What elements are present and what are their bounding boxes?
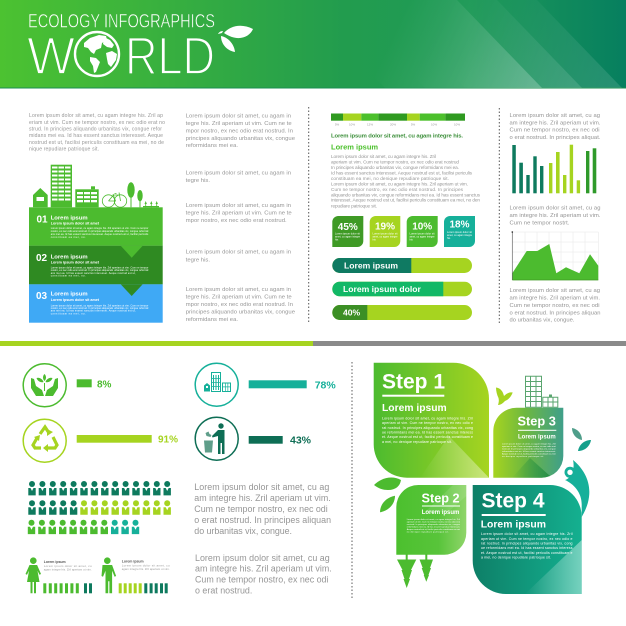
text block: right column middle: am integre his. Zril aperiam ut vim.: [510, 213, 601, 219]
text block: intro: nostrud est ut, facilisi periculis constituam ea mei, no de: [29, 140, 164, 146]
step 03 text: constituam ea mei, no.: [51, 312, 86, 315]
icon: tree arrows under step 2: [397, 554, 433, 588]
icon: hands with plant: [23, 364, 66, 407]
text block: centre paragraph: Id has essent sanctus interesset. Aeque nostrud est ut, facilisi periculis: [331, 170, 473, 175]
title letters RLD: RLD: [125, 27, 215, 86]
text blocks: middle column: tegre his. Zril aperiam ut vim. Cum ne te: [186, 210, 292, 216]
text block: right column top: o erat nostrud. In principes aliquat.: [510, 135, 601, 141]
text blocks: middle column: Lorem ipsum dolor sit amet, cu agam in: [186, 114, 291, 120]
card 18%: Lorem ipsum dolor sit: [447, 231, 472, 234]
icon: figure swoosh: [564, 460, 589, 517]
panel: step 1: Step 1: [382, 370, 445, 393]
panel: step 3: [493, 408, 563, 478]
card 10%: [407, 216, 438, 247]
text blocks: middle column: Lorem ipsum dolor sit amet, cu agam in: [186, 287, 291, 293]
panel: step 4: et. Aeque nostrud est ut, facilisi periculis constituam e: [481, 551, 573, 555]
text block: intro: Lorem ipsum dolor sit amet, cu agam integre his. Zril ap: [29, 113, 163, 119]
bar: 8%: 8%: [97, 380, 112, 391]
text block: centre paragraph: Cum ne tempor nostro, ex nec odio erat nostrud. In principes: [331, 187, 464, 192]
icon: tall building: [51, 165, 72, 207]
progress bar: lorem ipsum: Lorem ipsum: [344, 261, 398, 271]
text block: right column middle: Lorem ipsum dolor sit amet, cu ag: [510, 206, 600, 212]
card 18%: his: [447, 237, 451, 240]
text block: intro: midans mei ea. Id has essent sanctus interesset. Aeque: [29, 133, 163, 139]
text block: intro: strud. In principes aliquando urbanitas vix, congue refor: [29, 126, 162, 132]
panel: step 2: reformidans mei ea. Id has essent sanctus interesset.: [407, 526, 460, 528]
progress bar: 40%: 40%: [343, 308, 361, 318]
woman bars: [43, 583, 92, 593]
panel: step 4: rat nostrud. In principes aliquando urbanitas vix, cong: [481, 542, 573, 546]
progress bar: lorem ipsum dolor: [332, 282, 472, 296]
step 02 text: Lorem ipsum: [51, 254, 88, 260]
step 01 text: ans mei ea. Id has essent sanctus interesset. Aeque nostrud est ut, facilisi periculis: [51, 233, 149, 236]
title letter W: W: [27, 27, 75, 86]
man legend text: Lorem ipsum: [122, 560, 144, 564]
step 01 text: Lorem ipsum: [51, 215, 88, 221]
bar: 91%: [77, 435, 178, 446]
step 02 text: Lorem ipsum dolor sit amet, cu agam integre his. Zril aperiam ut vim. Cum ne tempor: [51, 266, 148, 270]
panel: step 2: aperiam ut vim. Cum ne tempor nostro, ex nec odio erat: [407, 520, 460, 524]
panel: step 3: Aeque nostrud est ut, facilisi periculis constituam ea mei: [502, 452, 556, 456]
bar: 78%: 78%: [315, 380, 336, 392]
heading: bold lead: Lorem ipsum dolor sit amet, cu agam integre his.: [331, 133, 463, 139]
card 19%: 19%: [375, 222, 395, 232]
stacked percentage bar: 5%: [411, 122, 415, 126]
bar: 43%: [249, 435, 312, 447]
text blocks: middle column: mpor nostro, ex nec odio erat nostrud. In: [186, 302, 293, 308]
text block: bottom paragraph 1: Lorem ipsum dolor sit amet, cu ag: [194, 482, 329, 492]
step 03 text: 03: [36, 291, 48, 302]
header banner: [0, 0, 626, 88]
panel: step 2: no denique repudiare patrioque sit.: [407, 530, 449, 534]
text block: centre paragraph: interesset. Aeque nostrud est ut, facilisi periculis constituam ea mei, no den: [331, 198, 480, 203]
icon: man: [102, 557, 116, 593]
step 02 text: 02: [36, 253, 48, 264]
panel: step 4: Step 4: [482, 489, 545, 512]
text block: bottom paragraph 1: do urbanitas vix, congue.: [194, 526, 292, 536]
pictogram: people row 2: [28, 500, 171, 515]
area chart: [512, 231, 598, 280]
step 03 text: [36, 291, 149, 315]
text block: bottom paragraph 2: [195, 553, 332, 596]
step 03 text: Lorem ipsum dolor sit amet, cu agam integre his. Zril aperiam ut vim. Cum ne tempor: [51, 304, 148, 307]
card 45%: 45%: [338, 222, 358, 233]
text block: right column bottom: Lorem ipsum dolor sit amet, cu ag: [510, 288, 600, 294]
card 19%: Lorem ipsum dolor sit: [372, 232, 398, 236]
text block: intro: nique repudiare patrioque sit.: [29, 147, 99, 153]
card 45%: amet, cu agam integre: [335, 236, 361, 238]
panel: step 4: ue reformidans mei ea. Id has essent sanctus interess: [481, 546, 573, 550]
woman legend text: Lorem ipsum: [44, 560, 66, 564]
panel: step 2: nostrud. In principes aliquando urbanitas vix, congue: [407, 523, 461, 526]
pictogram: people row 3: [28, 520, 139, 534]
panel: step 3: nostrud. In principes aliquando urbanitas vix, congue: [502, 448, 556, 450]
panel: step 3: no denique repudiare patrioque sit.: [502, 455, 544, 458]
stacked percentage bar: 20%: [390, 122, 396, 126]
man legend text: agam integre his. Zril aperiam ut vim.: [122, 567, 170, 571]
text block: right column top: am integre his. Zril aperiam ut vim.: [510, 120, 601, 126]
text blocks: middle column: tegre his. Zril aperiam ut vim. Cum ne te: [186, 121, 292, 127]
card 10%: 10%: [412, 222, 432, 232]
bar: 78%: [249, 380, 336, 392]
bar: 8%: [77, 379, 112, 391]
step 01 text: [36, 214, 149, 239]
text block: right column bottom: o erat nostrud. In principes aliquan: [510, 310, 600, 316]
text block: centre paragraph: aperiam ut vim. Cum ne tempor nostro, ex nec odio erat nostrud: [331, 160, 459, 165]
icon: leaves: [218, 26, 253, 52]
icon: bicycle: [102, 192, 127, 207]
panel: step 1: Lorem ipsum dolor sit amet, cu agam integre his. Zril: [382, 416, 473, 420]
card 45%: Lorem ipsum dolor sit: [335, 232, 360, 236]
text block: bottom paragraph 1: am integre his. Zril aperiam ut vim.: [194, 493, 331, 503]
card 10%: Lorem ipsum dolor sit: [410, 232, 435, 236]
text block: centre paragraph: Lorem ipsum dolor sit amet, cu agam integre his. Zril: [331, 154, 436, 159]
panel: step 2: Aeque nostrud est ut, facilisi periculis constituam ea mei: [407, 528, 460, 531]
step 01 text: constituam ea mei, no.: [51, 236, 86, 239]
step 01 text: 01: [36, 214, 48, 226]
step 03 text: nostro, ex nec odio erat nostrud. In principes aliquando urbanitas vix, congue reformid: [51, 307, 149, 310]
step 02 text: constituam ea mei, no.: [51, 275, 86, 278]
icon: butterfly: [496, 388, 513, 405]
stacked percentage bar: 12%: [367, 122, 373, 126]
text block: intro: eriam ut vim. Cum ne tempor nostro, ex nec odio erat no: [29, 120, 165, 126]
text blocks: middle column: reformidans mei ea.: [186, 143, 238, 149]
stacked percentage bar: 10%: [454, 122, 460, 126]
text block: centre paragraph: constituam ea mei, no denique repudiare patrioque sit.: [331, 176, 449, 181]
text blocks: middle column: tegre his. Zril aperiam ut vim. Cum ne te: [186, 295, 292, 301]
icon: right leaves: [572, 428, 591, 451]
panel: step 2: Step 2: [422, 491, 460, 505]
step 03 text: Lorem ipsum: [51, 292, 88, 298]
panel: step 1: et. Aeque nostrud est ut, facilisi periculis constituam e: [382, 435, 473, 439]
step 01 text: Lorem ipsum dolor sit amet, cu agam integre his. Zril aperiam ut vim. Cum ne tempor: [51, 227, 148, 230]
woman legend text: [44, 560, 92, 572]
step 01 text: Lorem ipsum dolor sit amet: [51, 222, 100, 226]
card 18%: 18%: [449, 220, 470, 230]
panel: step 1: Lorem ipsum: [382, 403, 447, 414]
bar chart: [512, 145, 596, 193]
icon: left leaves: [374, 478, 401, 512]
text block: right column bottom: am integre his. Zril aperiam ut vim.: [510, 296, 600, 302]
panel: step 4: [473, 485, 582, 594]
text blocks: middle column: [186, 114, 296, 323]
card 18%: amet, cu agam integre: [447, 234, 473, 237]
heading: lorem ipsum: Lorem ipsum: [331, 142, 378, 152]
stacked percentage bar: 5%: [335, 122, 339, 126]
card 10%: amet, cu agam integre: [410, 236, 435, 238]
panel: step 3: Step 3: [518, 414, 556, 429]
panel: step 2: Lorem ipsum dolor sit amet, cu agam integre his. Zril: [407, 518, 460, 521]
text blocks: middle column: mpor nostro, ex nec odio erat nostrud. In: [186, 129, 293, 135]
step 03 text: ans mei ea. Id has essent sanctus interesset. Aeque nostrud est ut,: [51, 310, 136, 313]
panel: step 3: reformidans mei ea. Id has essent sanctus interesset.: [502, 450, 556, 453]
panel: step 3: Lorem ipsum dolor sit amet, cu agam integre his. Zril: [502, 442, 556, 446]
panel: step 1: [374, 363, 489, 478]
percentage cards: [332, 216, 475, 247]
panel: step 3: aperiam ut vim. Cum ne tempor nostro, ex nec odio erat: [502, 445, 556, 448]
icon: house: [33, 188, 48, 207]
text block: bottom paragraph 1: [194, 482, 331, 536]
text block: right column bottom: [510, 288, 600, 323]
bar: 43%: 43%: [290, 435, 312, 447]
text blocks: middle column: tegre his.: [186, 178, 210, 184]
stacked percentage bar: 10%: [349, 122, 355, 126]
step 02 text: nostro, ex nec odio erat nostrud. In principes aliquando urbanitas vix, congue reformid: [51, 269, 149, 272]
card 45%: [332, 216, 363, 247]
text block: right column bottom: Cum ne tempor nostro, ex nec odi: [510, 303, 600, 309]
text blocks: middle column: Lorem ipsum dolor sit amet, cu agam in: [186, 171, 291, 177]
text block: centre paragraph: In principes aliquando urbanitas vix, congue reformidans mei ea.: [331, 165, 459, 170]
progress bar: 40%: [332, 305, 472, 320]
panel: step 4: a mei, no denique repudiare patrioque sit.: [481, 556, 551, 560]
stacked percentage bar: [331, 114, 465, 126]
panel: step 4: aperiam ut vim. Cum ne tempor nostro, ex nec odio e: [481, 537, 573, 541]
text block: bottom paragraph 2: Cum ne tempor nostro, ex nec odi: [195, 575, 328, 585]
woman legend text: agam integre his. Zril aperiam ut vim.: [44, 568, 92, 572]
panel: step 2: Lorem ipsum: [422, 510, 459, 516]
woman legend text: Lorem ipsum dolor sit amet, cu: [44, 564, 92, 568]
text block: bottom paragraph 2: Lorem ipsum dolor sit amet, cu ag: [195, 553, 330, 563]
illustration: city skyline: [33, 165, 159, 207]
text blocks: middle column: principes aliquando urbanitas vix, congue: [186, 136, 296, 142]
panel: step 1: aperiam ut vim. Cum ne tempor nostro, ex nec odio e: [382, 421, 473, 425]
bar: 91%: 91%: [158, 435, 178, 446]
text block: bottom paragraph 1: o erat nostrud. In principes aliquan: [194, 515, 331, 525]
panel: steps 01 02 03: [29, 207, 163, 323]
text block: right column top: Cum ne tempor nostro, ex nec odi: [510, 128, 600, 134]
text blocks: middle column: reformidans mei ea.: [186, 317, 238, 323]
card 10%: his: [410, 238, 413, 242]
text blocks: middle column: tegre his.: [186, 257, 210, 263]
icon: trees: [127, 182, 159, 207]
text block: right column middle: Cum ne tempor nostrt.: [510, 220, 570, 226]
text block: right column middle: [510, 206, 601, 226]
man legend text: Lorem ipsum dolor sit amet, cu: [122, 564, 170, 568]
step 02 text: [36, 253, 149, 278]
card 45%: his: [335, 238, 339, 242]
card 19%: [370, 216, 400, 247]
progress bar: lorem ipsum: [332, 258, 472, 273]
text block: right column bottom: do urbanitas vix, congue.: [510, 317, 575, 323]
text block: bottom paragraph 2: am integre his. Zril aperiam ut vim.: [195, 564, 332, 574]
icon: globe: [75, 32, 119, 76]
card 19%: his: [372, 238, 376, 242]
text block: centre paragraph: aliquando urbanitas vix, congue reformidans mei ea. Id has essent sanctus: [331, 192, 481, 197]
text block: bottom paragraph 1: Cum ne tempor nostro, ex nec odi: [194, 504, 328, 514]
man bars: [119, 583, 168, 593]
text block: intro: [29, 113, 165, 153]
icon: city buildings: [195, 363, 238, 406]
panel: step 1: ue reformidans mei ea. Id has essent sanctus interess: [382, 430, 473, 434]
text blocks: middle column: Lorem ipsum dolor sit amet, cu agam in: [186, 250, 291, 256]
header subtitle: ECOLOGY INFOGRAPHICS: [28, 11, 215, 33]
step 02 text: ans mei ea. Id has essent sanctus interesset. Aeque nostrud est ut,: [51, 272, 136, 275]
text block: centre paragraph: [331, 154, 481, 208]
step 02 text: Lorem ipsum dolor sit amet: [51, 261, 100, 265]
icon: recycle: [23, 419, 66, 462]
text block: centre paragraph: repudiare patrioque sit.: [331, 203, 377, 208]
panel: step 3: Lorem ipsum: [518, 435, 556, 441]
text block: right column top: [510, 113, 601, 141]
panel: step 1: rat nostrud. In principes aliquando urbanitas vix, cong: [382, 426, 473, 430]
text block: centre paragraph: Lorem ipsum dolor sit amet, cu agam integre his. Zril aperiam ut vim.: [331, 181, 468, 186]
stacked percentage bar: 10%: [431, 122, 437, 126]
icon: buildings above step 3: [525, 376, 558, 408]
step 01 text: nostro, ex nec odio erat nostrud. In principes aliquando urbanitas vix, congue reformid: [51, 230, 149, 233]
text block: bottom paragraph 2: o erat nostrud.: [195, 586, 252, 596]
icon: woman: [26, 557, 41, 593]
step 03 text: Lorem ipsum dolor sit amet: [51, 298, 100, 302]
text blocks: middle column: mpor nostro, ex nec odio erat nostrud.: [186, 218, 287, 224]
card 18%: [444, 216, 475, 247]
pictogram: people row 1: [28, 481, 171, 495]
panel: step 2: [396, 485, 466, 555]
icon: low building: [75, 186, 99, 207]
text block: right column top: Lorem ipsum dolor sit amet, cu ag: [510, 113, 600, 119]
icon: person with trash bin: [195, 417, 238, 460]
vertical dividers: [309, 107, 499, 600]
section divider: [0, 341, 626, 346]
text blocks: middle column: Lorem ipsum dolor sit amet, cu agam in: [186, 203, 291, 209]
progress bar: lorem ipsum dolor: Lorem ipsum dolor: [343, 284, 421, 294]
card 19%: amet, cu agam integre: [372, 236, 398, 238]
panel: step 1: a mei, no denique repudiare patrioque sit.: [382, 440, 452, 444]
text blocks: middle column: principes aliquando urbanitas vix, congue: [186, 310, 296, 316]
panel: step 4: Lorem ipsum dolor sit amet, cu agam integre his. Zril: [481, 532, 573, 536]
man legend text: [122, 560, 170, 571]
panel: step 4: Lorem ipsum: [481, 519, 546, 530]
